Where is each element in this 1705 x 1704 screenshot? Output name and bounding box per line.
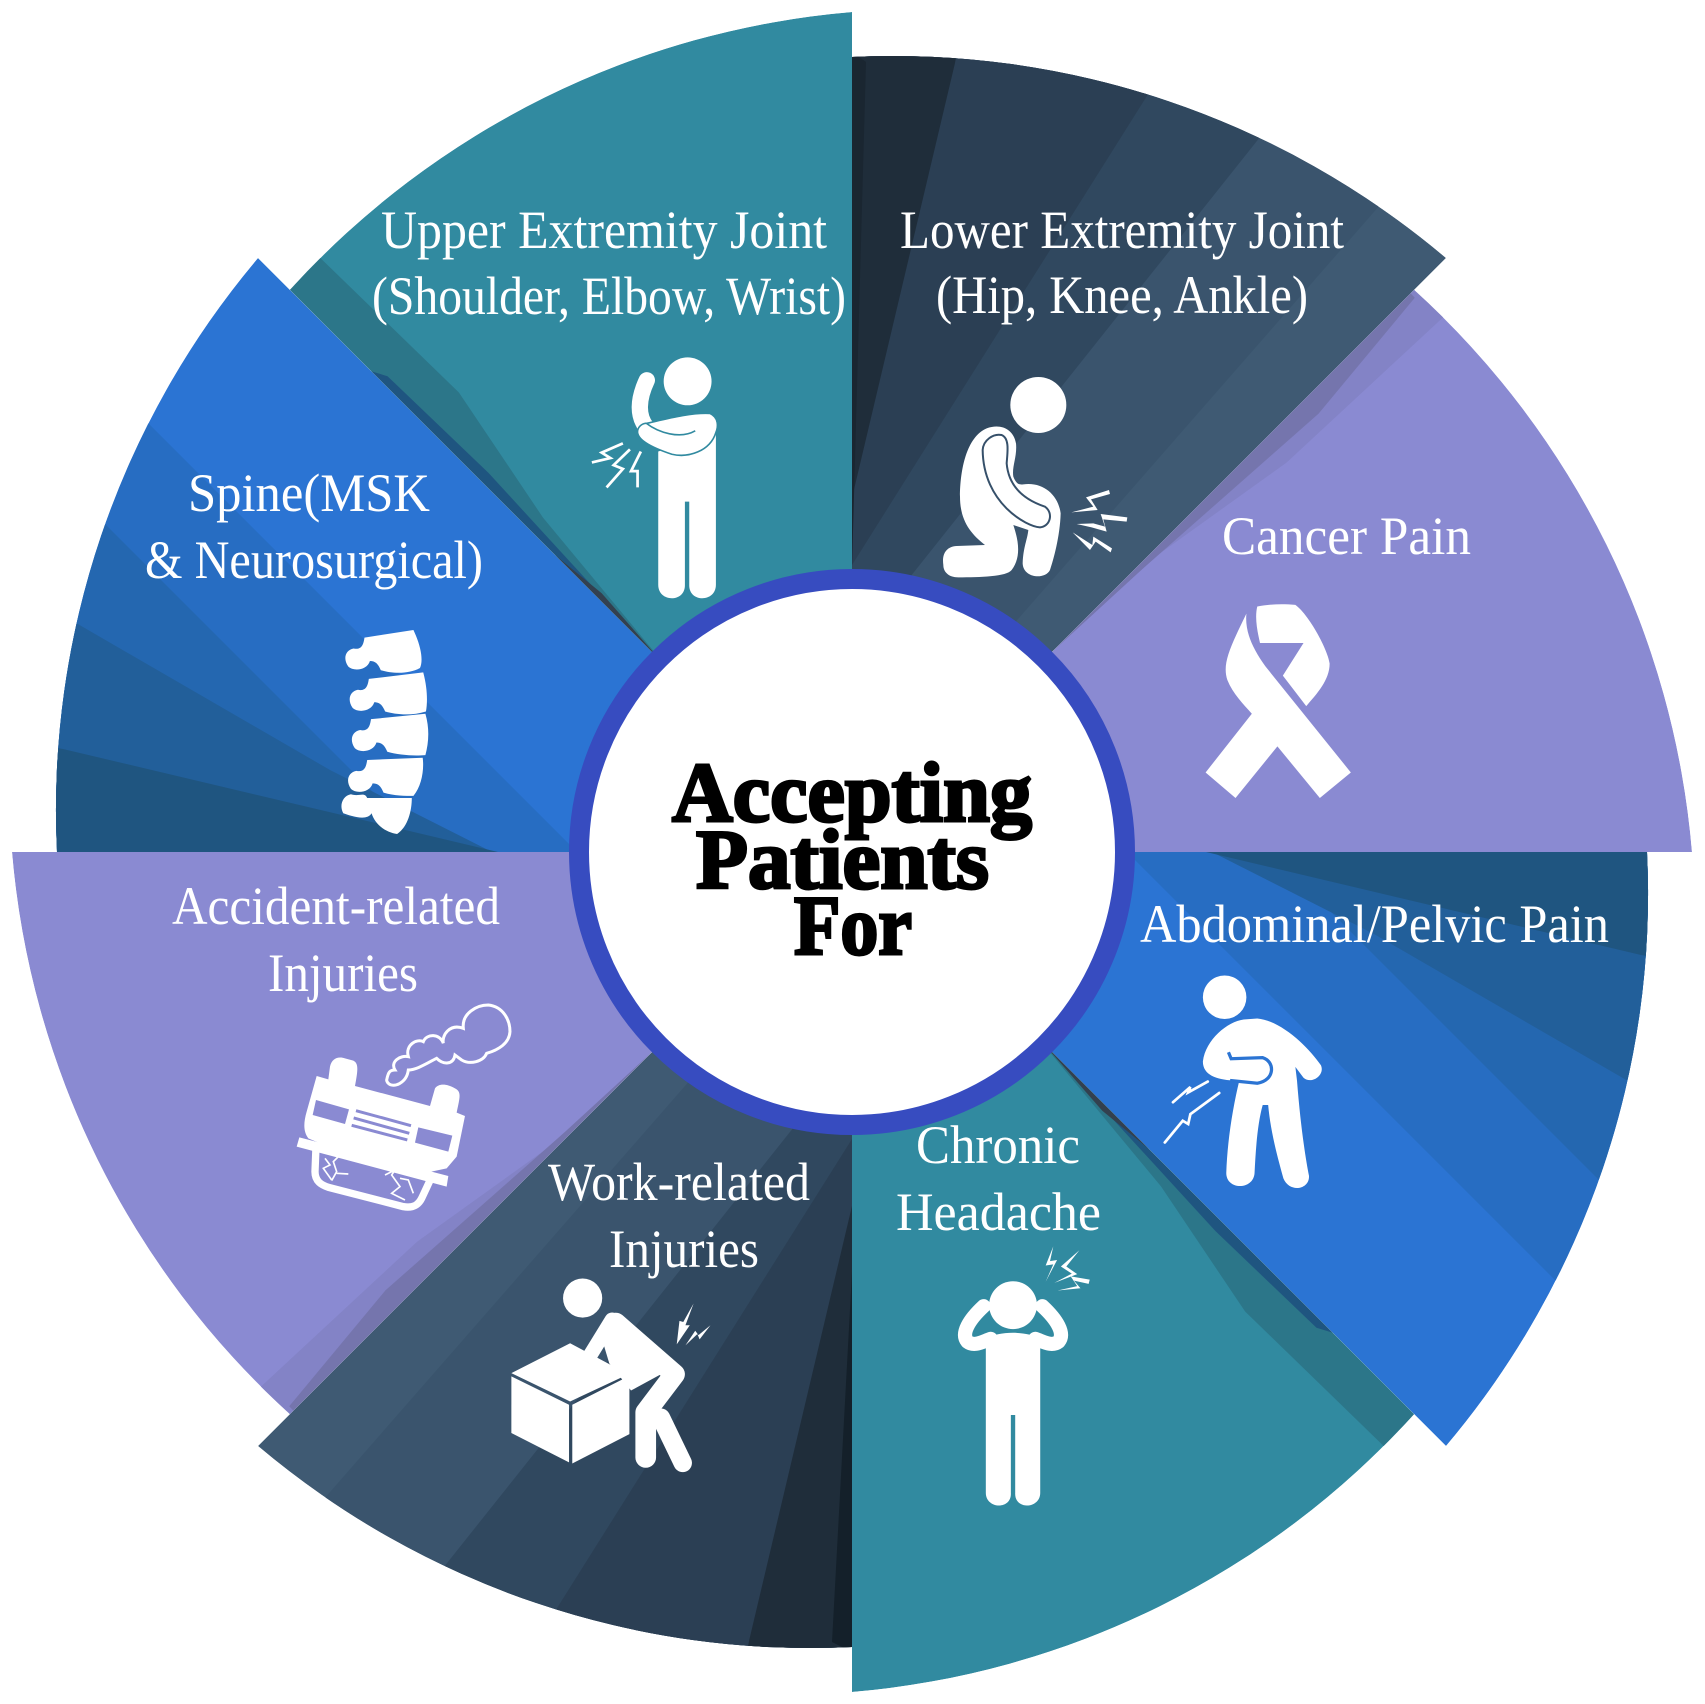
panel: cancer pain bbox=[1052, 290, 1692, 852]
panel: chronic headache bbox=[852, 1052, 1414, 1692]
panel: accident-related injuries bbox=[12, 852, 652, 1414]
title: For bbox=[794, 879, 912, 973]
label: lower extremity: (Hip, Knee, Ankle) bbox=[936, 265, 1308, 325]
title: Patients bbox=[696, 813, 989, 907]
label: upper extremity: Upper Extremity Joint bbox=[381, 200, 827, 260]
label: accident-related injuries: Accident-related bbox=[172, 876, 500, 936]
title: Accepting bbox=[672, 746, 1032, 840]
panel: spine bbox=[56, 258, 652, 852]
centre circle bbox=[579, 579, 1125, 1125]
label: abdominal pelvic pain: Abdominal/Pelvic Pain bbox=[1140, 894, 1609, 954]
label: chronic headache: Headache bbox=[896, 1182, 1101, 1242]
icon: awareness ribbon bbox=[1206, 604, 1351, 798]
label: work-related injuries: Injuries bbox=[609, 1219, 759, 1279]
label: upper extremity: (Shoulder, Elbow, Wrist) bbox=[372, 266, 846, 326]
panel: work-related injuries bbox=[258, 1052, 852, 1648]
label: work-related injuries: Work-related bbox=[548, 1152, 810, 1212]
icon: overturned car with smoke bbox=[297, 1005, 510, 1207]
label: cancer pain: Cancer Pain bbox=[1222, 506, 1471, 566]
icon: figure holding head bbox=[965, 1246, 1090, 1505]
label: chronic headache: Chronic bbox=[916, 1115, 1080, 1175]
icon: figure holding elbow bbox=[592, 357, 717, 598]
panel: lower extremity joint bbox=[852, 56, 1446, 652]
label: lower extremity: Lower Extremity Joint bbox=[900, 200, 1344, 260]
panel: abdominal / pelvic pain bbox=[1052, 852, 1648, 1446]
label: spine: & Neurosurgical) bbox=[145, 530, 483, 590]
icon: figure lifting heavy box bbox=[511, 1278, 710, 1463]
label: accident-related injuries: Injuries bbox=[268, 943, 418, 1003]
icon: vertebrae bbox=[341, 630, 428, 834]
panel: upper extremity joint bbox=[290, 12, 852, 652]
icon: kneeling figure with knee pain bbox=[943, 377, 1127, 577]
label: spine: Spine(MSK bbox=[188, 463, 430, 523]
icon: figure holding abdomen bbox=[1165, 975, 1322, 1188]
